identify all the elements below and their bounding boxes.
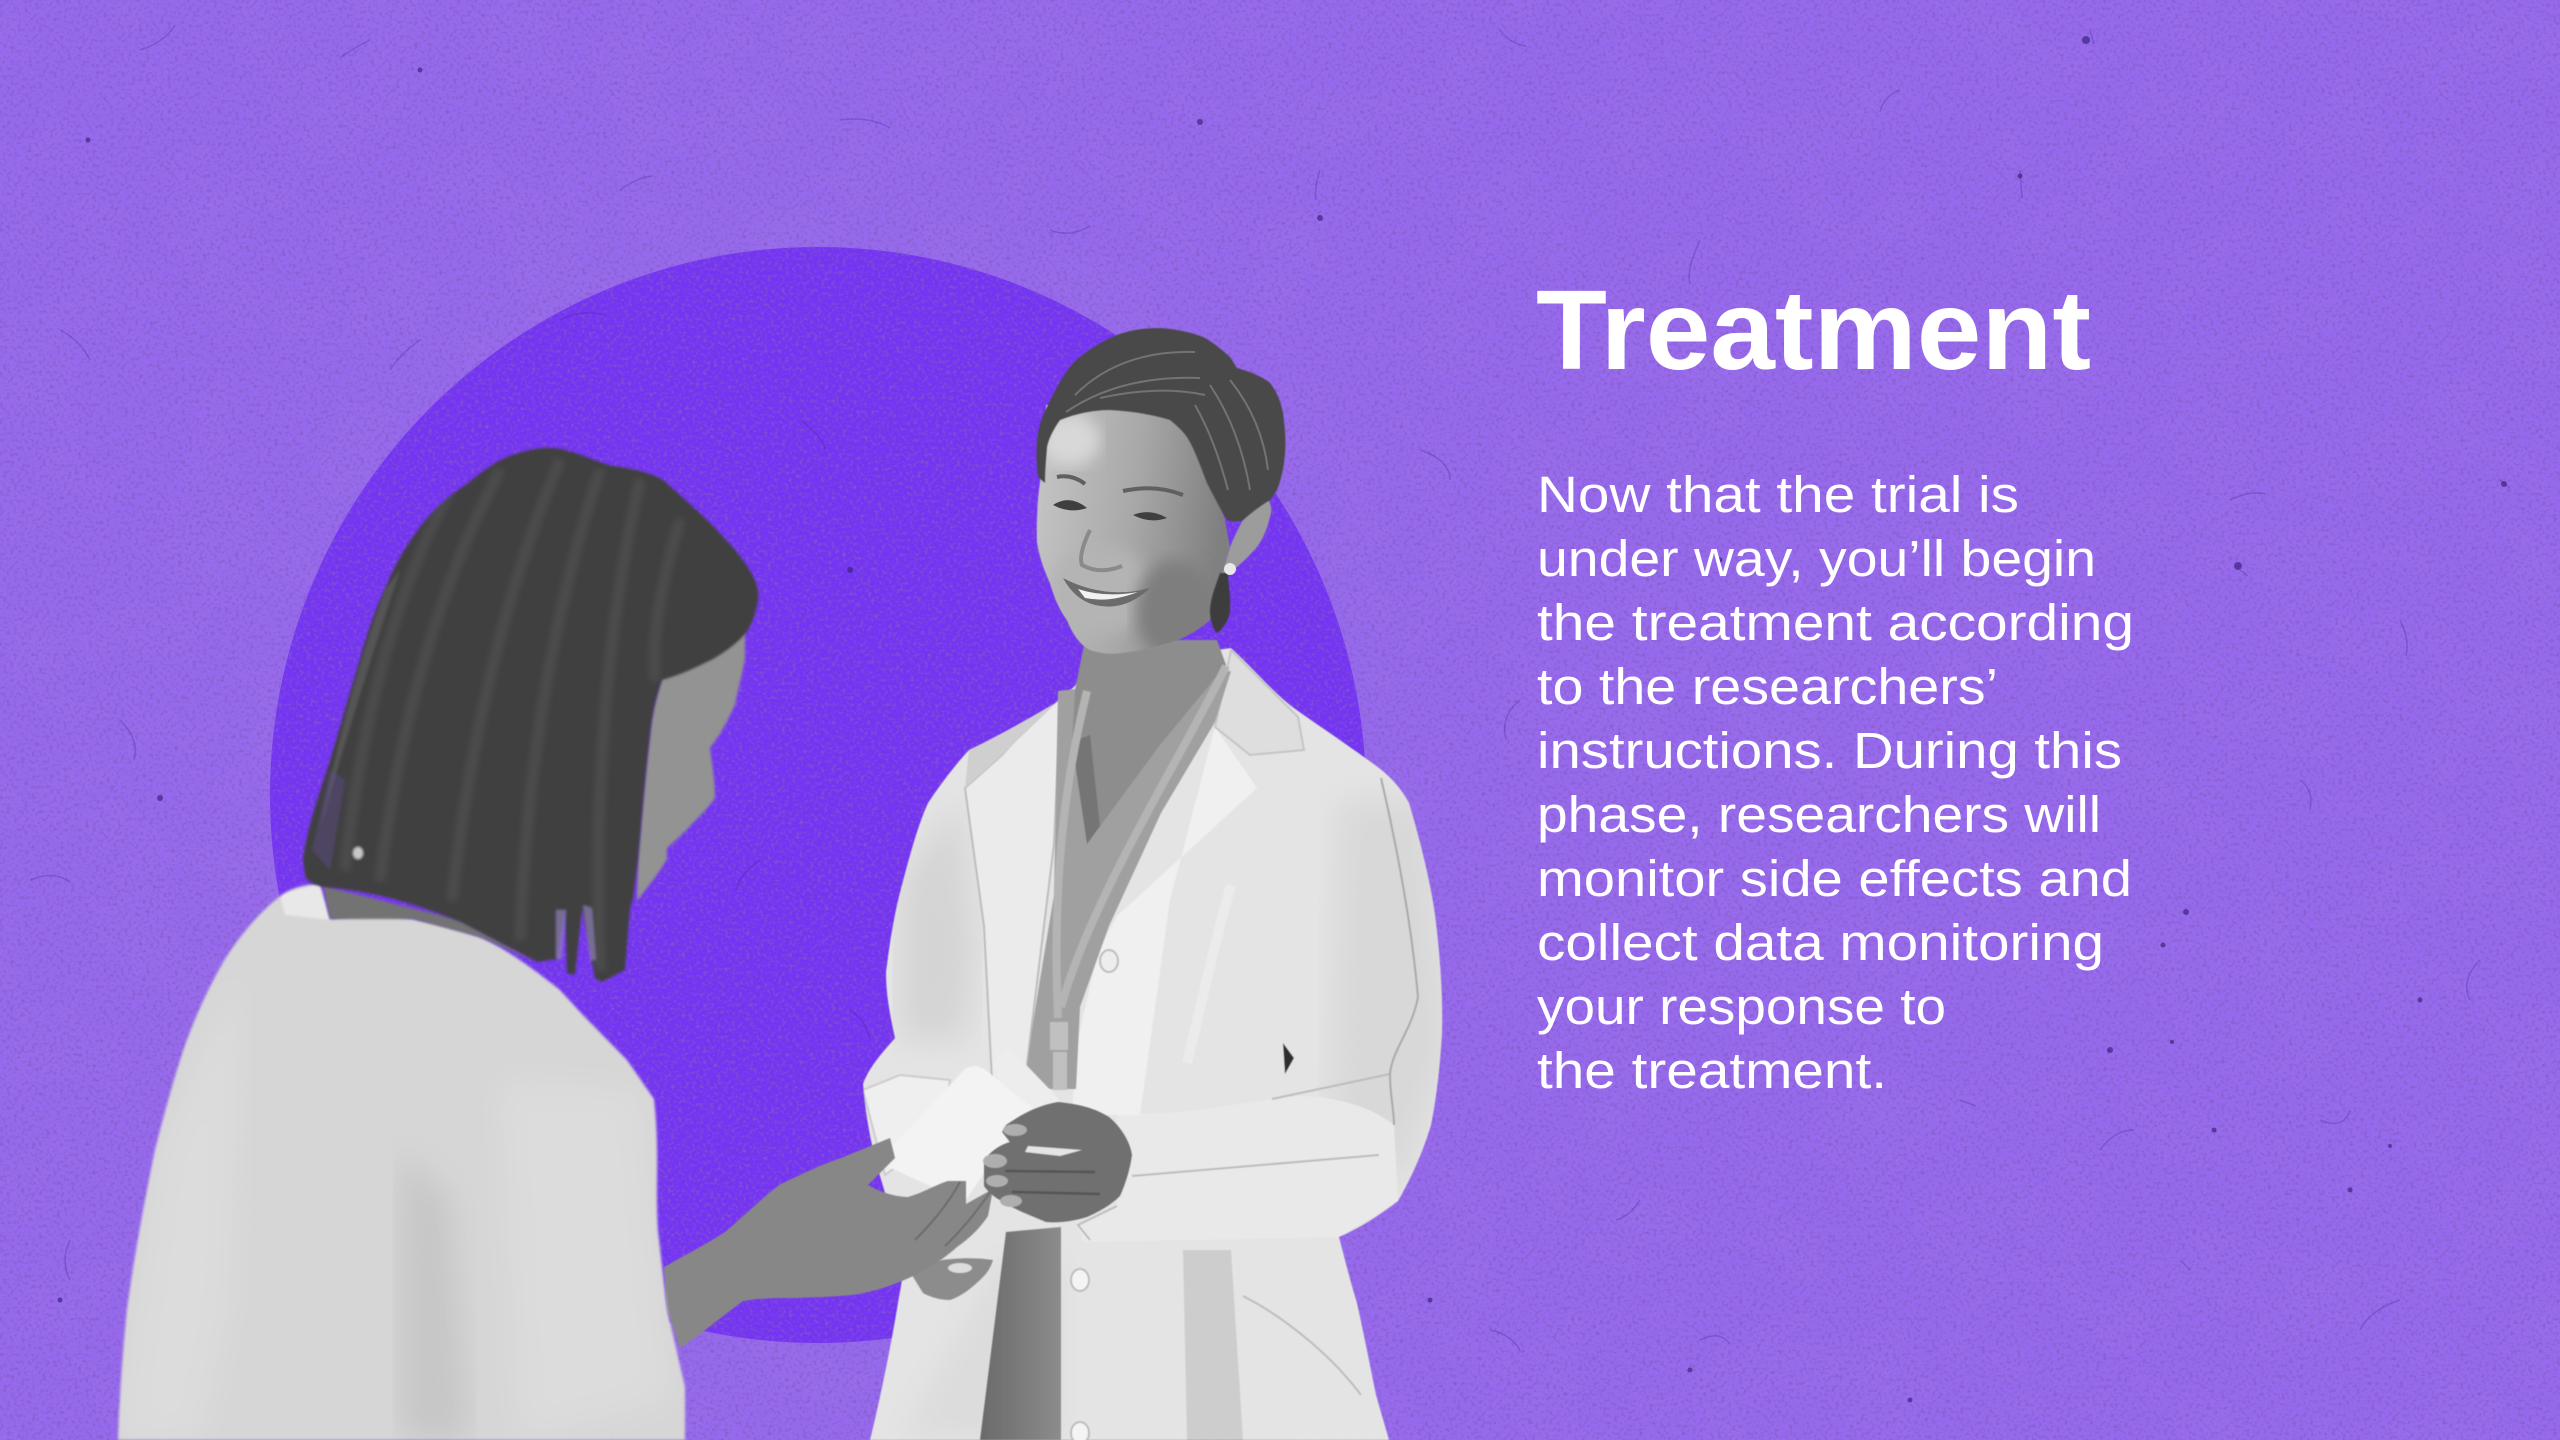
purple circle behind the figures bbox=[270, 247, 1366, 1343]
body paragraph: under way, you’ll begin bbox=[1537, 530, 2096, 587]
body paragraph: monitor side effects and bbox=[1537, 850, 2132, 907]
gray side panel below sleeve bbox=[1183, 1250, 1243, 1440]
doctor: scrubs, neck and lanyard bbox=[980, 640, 1231, 1440]
photo: doctor and patient exchanging a pill bottle bbox=[118, 328, 1450, 1440]
body paragraph bbox=[1537, 466, 2134, 1099]
patient: t-shirt bbox=[118, 884, 685, 1440]
body paragraph: phase, researchers will bbox=[1537, 786, 2101, 843]
body paragraph: Now that the trial is bbox=[1537, 466, 2019, 523]
pill bottle bbox=[883, 1046, 1060, 1204]
forearm sleeve bbox=[1320, 1098, 1396, 1185]
doctor: lower hand bbox=[907, 1258, 993, 1300]
body paragraph: the treatment according bbox=[1537, 594, 2134, 651]
body paragraph: your response to bbox=[1537, 978, 1946, 1035]
patient: hair bbox=[303, 448, 758, 982]
body paragraph: to the researchers’ bbox=[1537, 658, 1998, 715]
body paragraph: the treatment. bbox=[1537, 1042, 1887, 1099]
doctor: lab coat bbox=[863, 648, 1450, 1440]
title: Treatment bbox=[1536, 267, 2091, 393]
doctor: head and hair bbox=[1036, 328, 1285, 660]
body paragraph: collect data monitoring bbox=[1537, 914, 2104, 971]
patient: neck and face bbox=[323, 632, 745, 962]
patient: raised arm and hand bbox=[664, 1138, 993, 1348]
doctor: hand holding bottle bbox=[983, 1102, 1132, 1222]
body paragraph: instructions. During this bbox=[1537, 722, 2122, 779]
